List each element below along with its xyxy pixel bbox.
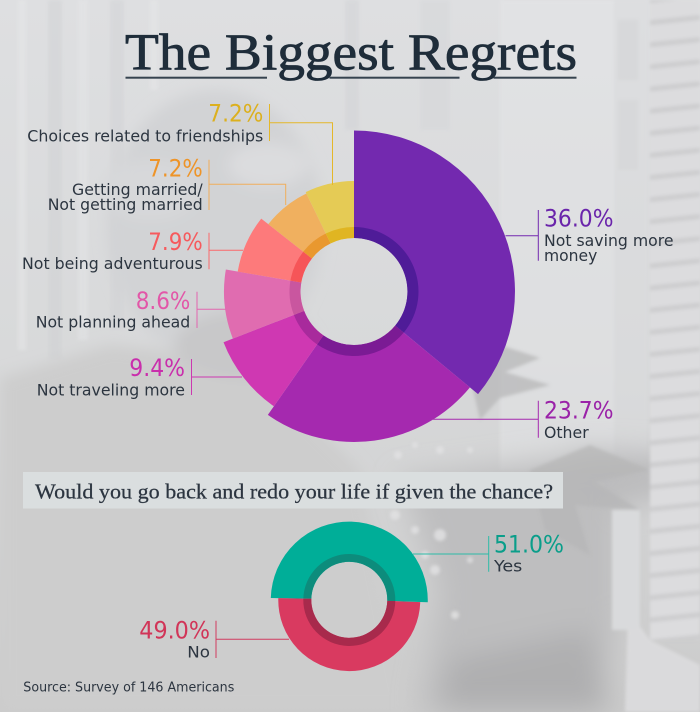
label: getting married 7.2%: 7.2% (148, 155, 203, 183)
label: other 23.7% (433, 396, 614, 442)
label: friendships 7.2%: 7.2% (208, 100, 263, 128)
label: not saving more money 36.0%: money (544, 246, 597, 265)
segment: yes (271, 522, 428, 602)
label: getting married 7.2%: Not getting married (48, 195, 203, 214)
label: yes 51.0%: 51.0% (494, 531, 564, 559)
segment: getting married (268, 193, 331, 258)
segment: other (268, 326, 470, 442)
label: not traveling more 9.4% (37, 354, 242, 399)
label: yes 51.0% (413, 531, 564, 576)
label: no 49.0% (139, 616, 289, 661)
label: not saving more money 36.0% (506, 205, 674, 265)
segment: not planning ahead (224, 270, 304, 339)
label: other 23.7%: 23.7% (544, 396, 614, 424)
label: not planning ahead 8.6%: 8.6% (136, 287, 190, 315)
label: yes 51.0%: Yes (493, 557, 522, 576)
label: other 23.7%: Other (544, 423, 589, 442)
segment: friendships (306, 181, 354, 243)
label: not traveling more 9.4%: Not traveling more (37, 380, 185, 399)
source note: Source: Survey of 146 Americans (23, 681, 235, 696)
title: The Biggest Regrets (125, 24, 577, 82)
label: not being adventurous 7.9%: 7.9% (148, 228, 203, 256)
label: no 49.0%: 49.0% (139, 616, 210, 644)
segment: no (278, 598, 420, 671)
label: getting married 7.2% (48, 155, 286, 214)
label: not saving more money 36.0%: Not saving more (544, 231, 674, 250)
question banner (23, 472, 563, 508)
main regrets donut chart (224, 130, 515, 442)
segment: not being adventurous (238, 219, 312, 282)
question banner: Would you go back and redo your life if given the chance? (35, 479, 553, 503)
label: getting married 7.2%: Getting married/ (72, 180, 203, 199)
label: not being adventurous 7.9%: Not being adventurous (22, 254, 203, 273)
yes/no donut chart (271, 522, 428, 671)
label: not planning ahead 8.6% (36, 287, 226, 332)
label: friendships 7.2%: Choices related to friendships (27, 127, 263, 146)
label: not planning ahead 8.6%: Not planning ahead (36, 313, 190, 332)
segment: not traveling more (224, 311, 323, 406)
segment: not saving more money (354, 130, 515, 394)
label: not being adventurous 7.9% (22, 228, 243, 273)
label: not traveling more 9.4%: 9.4% (129, 354, 185, 382)
label: friendships 7.2% (27, 100, 333, 185)
label: no 49.0%: No (187, 642, 210, 661)
label: not saving more money 36.0%: 36.0% (544, 205, 614, 233)
